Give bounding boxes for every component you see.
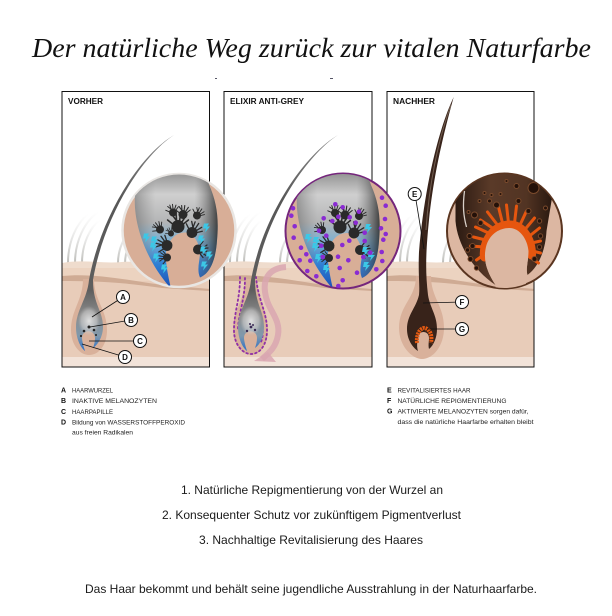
decorative specks xyxy=(215,78,333,79)
callout G xyxy=(456,322,468,336)
legend right: F xyxy=(387,398,392,405)
benefits list: 2. Konsequenter Schutz vor zukünftigem Pigmentverlust xyxy=(162,508,462,522)
hair: grey xyxy=(76,135,174,351)
panel: nachher xyxy=(387,92,535,367)
legend left: HAARPAPILLE xyxy=(72,409,114,416)
panel heading: NACHHER xyxy=(393,97,435,106)
hair: treated xyxy=(238,135,338,351)
melanocytes xyxy=(150,203,208,264)
label lines and callouts A-D xyxy=(82,290,146,364)
magnified circle: elixir xyxy=(286,168,400,289)
follicle sheath xyxy=(71,279,107,355)
legend right: NATÜRLICHE REPIGMENTIERUNG xyxy=(398,397,506,405)
legend right: G xyxy=(387,408,393,416)
purple sheath dots xyxy=(234,277,267,354)
legend right: REVITALISIERTES HAAR xyxy=(398,388,471,394)
panel heading: ELIXIR ANTI-GREY xyxy=(230,97,305,106)
panel: elixir anti-grey xyxy=(224,92,372,367)
small melanocytes xyxy=(80,326,97,337)
arrow: pink upward flow xyxy=(262,267,286,359)
title: Der natürliche Weg zurück zur vitalen Naturfarbe xyxy=(31,33,591,63)
small orange melanocytes xyxy=(417,328,431,343)
small melanocytes with dots xyxy=(246,323,256,332)
magnified circle: nachher xyxy=(447,171,562,291)
callout B: B xyxy=(128,316,134,325)
callout F: F xyxy=(460,298,465,307)
legend left: HAARWURZEL xyxy=(72,388,113,394)
callout E: E xyxy=(412,190,418,199)
callout A: A xyxy=(120,293,126,302)
peroxide sparks xyxy=(143,224,213,274)
papilla xyxy=(485,228,528,291)
panel: vorher xyxy=(62,92,210,367)
legend right: AKTIVIERTE MELANOZYTEN sorgen dafür, xyxy=(398,408,529,416)
hair: dark revitalised xyxy=(407,97,454,351)
callout G: G xyxy=(459,325,465,334)
legend right xyxy=(387,388,534,426)
follicle sheath xyxy=(233,279,268,355)
follicle sheath xyxy=(399,276,444,359)
legend right: E xyxy=(387,388,392,394)
benefits list xyxy=(162,483,462,547)
magnified circle: vorher xyxy=(122,168,236,288)
legend left: D xyxy=(61,420,66,426)
legend left: aus freien Radikalen xyxy=(72,430,133,436)
callout D: D xyxy=(122,353,128,362)
legend left xyxy=(61,388,185,436)
orange active melanocytes xyxy=(470,205,540,263)
benefits list: 3. Nachhaltige Revitalisierung des Haares xyxy=(199,533,423,547)
legend right: dass die natürliche Haarfarbe erhalten bleibt xyxy=(398,419,534,426)
callout F xyxy=(456,296,468,308)
bulb highlight xyxy=(240,306,262,336)
legend left: Bildung von WASSERSTOFFPEROXID xyxy=(72,420,185,426)
pigment granules xyxy=(465,180,548,270)
callout C: C xyxy=(137,337,143,346)
callout E xyxy=(408,188,421,200)
legend left: B xyxy=(61,398,66,405)
purple active-ingredient dots xyxy=(289,195,388,288)
legend left: A xyxy=(61,388,66,394)
legend left: C xyxy=(61,409,66,416)
legend left: INAKTIVE MELANOZYTEN xyxy=(72,398,157,405)
panel heading: VORHER xyxy=(68,97,103,106)
benefits list: 1. Natürliche Repigmentierung von der Wurzel an xyxy=(181,483,443,497)
label lines and callouts E-G xyxy=(408,188,468,336)
closing statement: Das Haar bekommt und behält seine jugendliche Ausstrahlung in der Naturhaarfarbe. xyxy=(85,582,537,596)
bulb highlight xyxy=(78,306,100,336)
